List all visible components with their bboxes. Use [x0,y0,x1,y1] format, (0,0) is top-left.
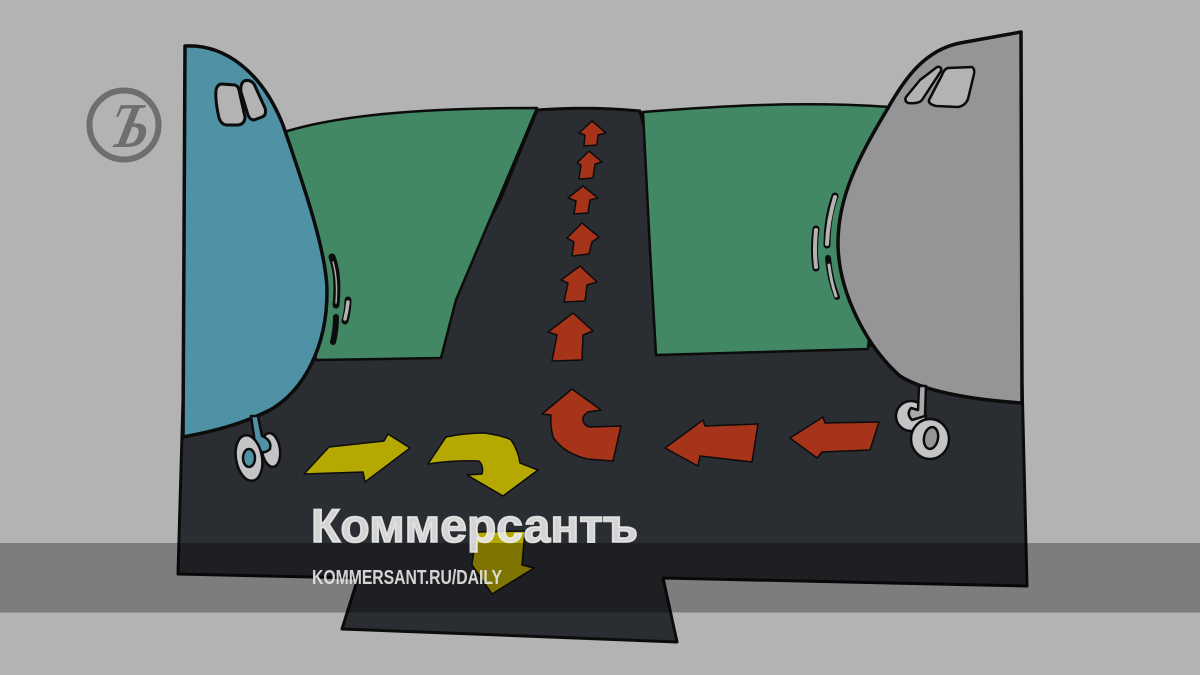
grey plane [814,32,1022,459]
apron and runway [178,108,1027,642]
blue plane cockpit windows [216,80,266,125]
airfield illustration [178,32,1027,642]
left green field [284,108,537,360]
grey plane cockpit windows [905,67,974,107]
blue plane fuselage [183,46,327,437]
grey plane engine marks [814,196,837,297]
brand name: Коммерсантъ [311,499,638,552]
yellow down arrow [472,531,534,594]
yellow arrows path [304,433,538,594]
publisher logo emblem: Ъ [103,90,160,161]
grey plane landing gear [896,386,949,459]
brand url: KOMMERSANT.RU/DAILY [312,567,503,589]
red arrows path [542,121,879,466]
yellow curved arrow [428,433,538,496]
yellow arrow right [304,434,410,482]
blue plane [183,46,348,483]
red u-turn arrow [542,389,621,461]
dark translucent band [0,543,1200,612]
grey plane fuselage [838,32,1022,403]
blue plane engine marks [332,257,348,342]
red arrow right [790,417,879,458]
right green field [643,104,890,355]
blue plane landing gear [232,416,282,483]
red up arrows column [548,121,606,361]
red arrow left [665,420,758,466]
